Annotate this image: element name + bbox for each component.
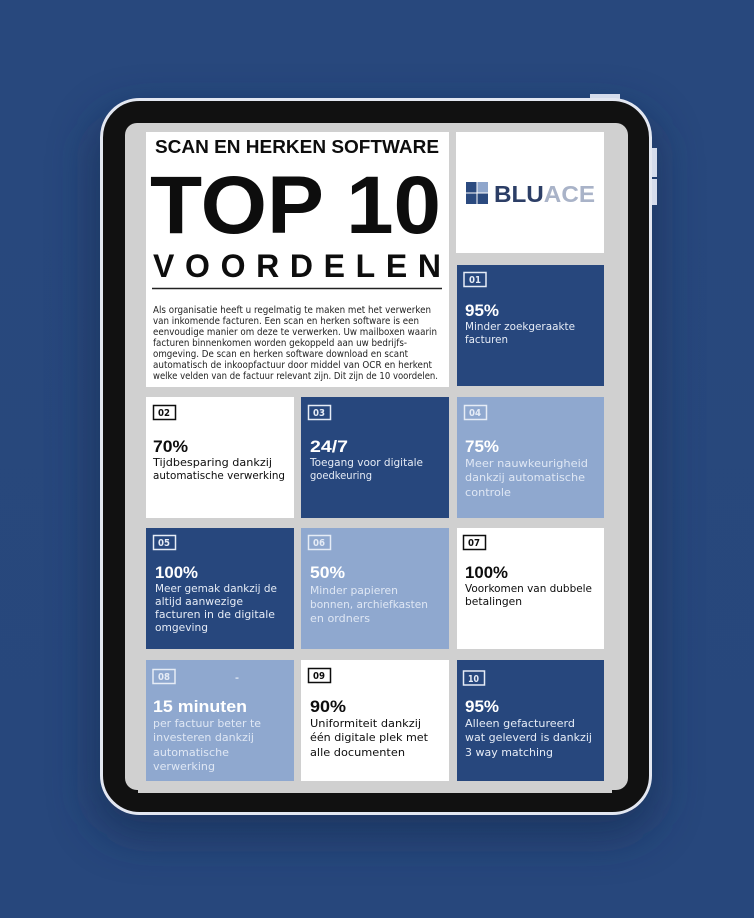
logo wordmark: BLUACE [494,181,595,207]
panel: card 05: altijd aanwezige [155,595,243,608]
panel: card 04 [457,397,604,518]
intro text: automatisch de inkoopfactuur door middel van OCR en herkent [153,360,432,371]
panel: card 01: Minder zoekgeraakte [465,320,575,333]
panel: card 01 [457,265,604,386]
title: top 10: TOP 10 [150,160,441,251]
panel: card 09: één digitale plek met [310,731,429,744]
panel: card 07: 07 [468,538,480,549]
tablet screen [125,123,628,793]
panel: card 01: 95% [465,301,499,320]
panel: card 08: automatische [153,746,229,759]
panel: card 05: 05 [158,538,170,549]
panel: card 02: automatische verwerking [153,469,285,482]
tablet buttons [590,94,657,205]
intro text [153,305,438,382]
panel: card 02: Tijdbesparing dankzij [152,456,272,469]
panel: card 09: alle documenten [310,746,405,759]
panel: card 10: 10 [468,674,479,685]
panel: card 01: facturen [465,333,508,346]
panel: card 03: Toegang voor digitale [309,456,423,469]
intro text: facturen binnenkomen worden gekoppeld aan uw bedrijfs- [153,338,407,349]
panel: header [146,132,449,387]
panel: card 08: verwerking [153,760,215,773]
intro text: Als organisatie heeft u regelmatig te maken met het verwerken [153,305,431,316]
panel: card 08 [146,660,294,781]
panel: card 05 [146,528,294,649]
panel: card 06: 06 [313,538,325,549]
panel: card 06: en ordners [310,612,370,625]
panel: card 05: facturen in de digitale [155,608,275,621]
panel: card 09: Uniformiteit dankzij [310,717,421,730]
panel: card 08: 15 minuten [153,697,247,716]
panel: card 05: Meer gemak dankzij de [155,582,277,595]
panel: card 08: 08 [158,672,170,683]
intro text: eenvoudige manier om deze te verwerken. Uw mailboxen waarin [153,327,437,338]
panel: card 10: Alleen gefactureerd [465,717,575,730]
panel: card 05: 100% [155,563,198,582]
panel: card 10: wat geleverd is dankzij [465,731,592,744]
icon: bluace squares [466,182,488,204]
panel: card 04: Meer nauwkeurigheid [465,457,588,470]
panel: card 10: 3 way matching [465,746,553,759]
panel: card 01: 01 [469,275,481,286]
heading: scan en herken software: SCAN EN HERKEN SOFTWARE [155,137,439,157]
panel: logo [456,132,604,253]
panel: card 10: 95% [465,697,499,716]
panel: card 06: 50% [310,563,345,582]
panel: card 09 [301,660,449,781]
panel: card 10 [457,660,604,781]
panel: card 06 [301,528,449,649]
tablet shadow [92,112,658,837]
panel: card 07: betalingen [465,595,522,608]
panel: card 07: Voorkomen van dubbele [465,582,592,595]
panel: card 02: 02 [158,408,170,419]
panel: card 04: controle [465,486,511,499]
panel: card 02: 70% [153,437,188,456]
tablet device [102,94,657,814]
panel: card 03: goedkeuring [310,469,372,482]
panel: card 03: 24/7 [310,437,348,456]
tablet bezel [102,100,650,814]
panel: card 08: per factuur beter te [153,717,261,730]
intro text: van inkomende facturen. Een scan en herken software is een [153,316,419,327]
panel: card 04: 04 [469,408,481,419]
panel: card 03 [301,397,449,518]
panel: card 04: 75% [465,437,499,456]
panel: card 04: dankzij automatische [465,471,585,484]
title: voordelen: VOORDELEN [153,248,441,284]
panel: card 06: Minder papieren [310,584,398,597]
panel: card 09: 90% [310,697,346,716]
panel: card 05: omgeving [155,621,208,634]
intro text: omgeving. De scan en herken software download en scant [153,349,408,360]
panel: card 02 [146,397,294,518]
panel: card 07: 100% [465,563,508,582]
panel: card 09: 09 [313,671,325,682]
intro text: welke velden van de factuur relevant zijn. Dit zijn de 10 voordelen. [153,371,438,382]
panel: card 03: 03 [313,408,325,419]
panel: card 07 [457,528,604,649]
panel: card 06: bonnen, archiefkasten [310,598,428,611]
panel: card 08: investeren dankzij [153,731,254,744]
